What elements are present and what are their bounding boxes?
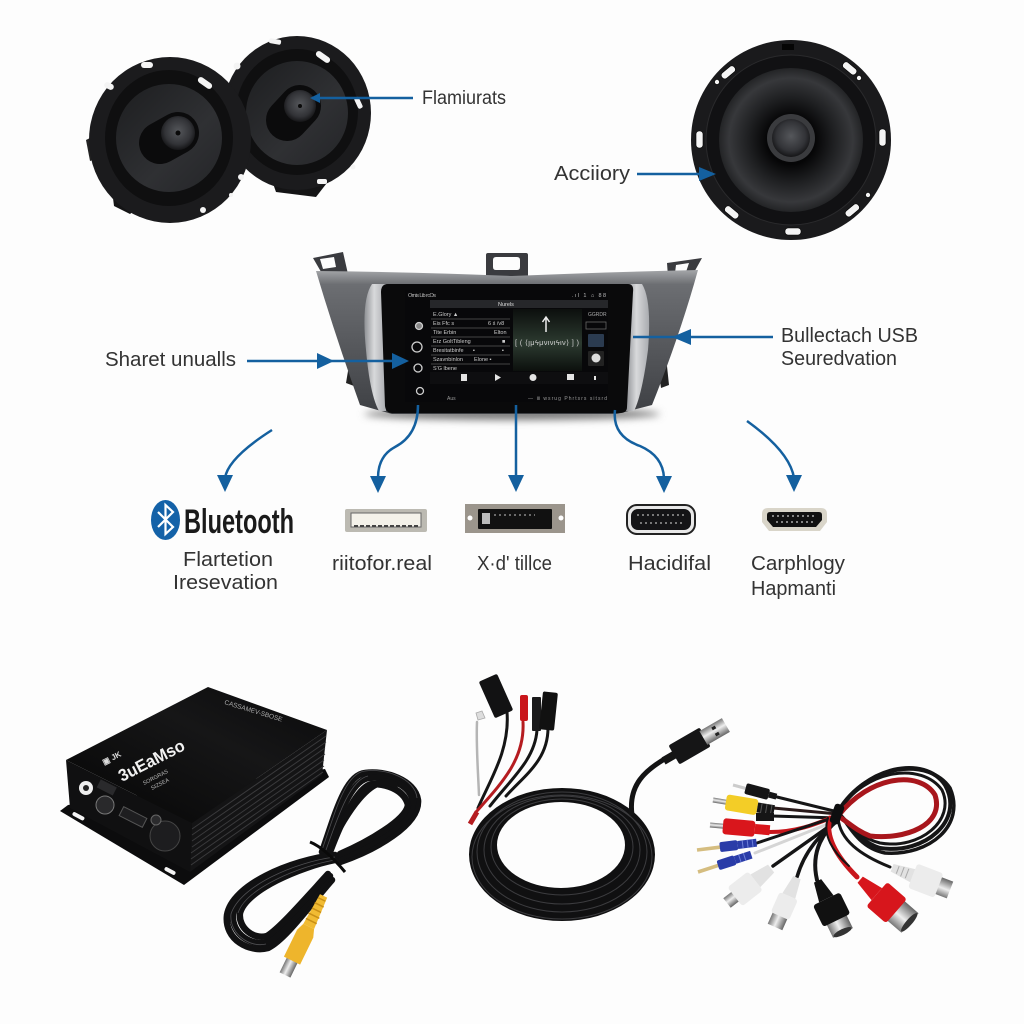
speaker pair, top left <box>86 36 371 223</box>
down arrow 2 <box>370 405 418 493</box>
red sheath accent <box>470 812 477 824</box>
label: Carphlogy Hapmanti: Carphlogy <box>751 553 845 575</box>
label: Flartetion Iresevation <box>173 549 278 594</box>
leads <box>777 797 838 812</box>
black panel <box>381 284 633 413</box>
amp printing: CASSAMEV-SBOSE <box>223 699 284 724</box>
plug: yellow <box>712 792 775 818</box>
front speaker <box>86 57 251 223</box>
cable tie <box>310 842 345 872</box>
top face <box>66 687 327 823</box>
label: Carphlogy Hapmanti: Hapmanti <box>751 578 836 600</box>
callout: Bullectach USB: Seuredvation <box>781 348 897 370</box>
screen: .ıl 1 ⌂ 88 <box>572 293 606 299</box>
USB lead <box>631 757 668 815</box>
down arrow 4 <box>615 410 672 493</box>
down arrow 1 <box>217 430 272 492</box>
side controls <box>588 334 604 347</box>
socket: white middle <box>766 874 806 931</box>
upper loop <box>322 772 418 862</box>
knot <box>829 803 845 825</box>
coil band <box>469 788 655 921</box>
track list: Elton <box>494 330 507 336</box>
track list: ■ <box>502 339 505 345</box>
screen: Nurels <box>498 302 514 308</box>
socket: black <box>804 874 857 941</box>
label: X·d' tillce: X·d' tillce <box>477 553 552 575</box>
RCA breakout harness <box>696 768 955 941</box>
screen: GGRDR <box>588 312 607 318</box>
oval port icon <box>627 505 695 534</box>
status row: Aus <box>447 396 456 402</box>
label: Flartetion Iresevation: Iresevation <box>173 572 278 594</box>
mounting tabs <box>313 252 348 277</box>
screen <box>405 290 608 402</box>
Bluetooth logo <box>151 500 294 541</box>
callout: Acciiory: Acciiory <box>554 163 630 185</box>
coil strand highlights <box>472 792 652 919</box>
amp printing: ▣ JK <box>101 750 123 767</box>
Bluetooth logo: Bluetooth <box>184 503 294 541</box>
down arrow 3 <box>508 405 524 492</box>
speaker, top right <box>691 40 891 240</box>
socket: white left <box>720 859 779 912</box>
flange <box>60 769 329 885</box>
track list: Bresitatbinfe <box>433 348 464 354</box>
map panel <box>513 309 582 371</box>
connector: red <box>520 695 528 721</box>
connector: black pair <box>532 691 558 731</box>
screen: Ornis Lib rcOs <box>408 293 436 299</box>
connector: phone jack <box>476 711 485 720</box>
plug: blue lower <box>696 850 753 877</box>
track list: Tite Erbin <box>433 330 456 336</box>
track list: Szavnbinlon <box>433 357 463 363</box>
head unit <box>313 252 702 420</box>
label: Hacidifal: Hacidifal <box>628 553 711 575</box>
HDMI port icon <box>762 508 827 531</box>
silver strips <box>364 284 386 411</box>
plug: red <box>709 817 770 838</box>
track list: Erz GoltTibleng <box>433 339 471 345</box>
track list: ▪ <box>473 348 475 354</box>
DVI port icon <box>465 504 565 533</box>
down arrow 5 <box>747 421 802 492</box>
callout: Flamiurats <box>310 88 506 109</box>
mounting slots <box>696 61 886 235</box>
figure-eight wires <box>755 768 954 880</box>
fan-out leads <box>476 712 548 812</box>
callout: Bullectach USB <box>633 325 918 370</box>
label: Carphlogy Hapmanti <box>751 553 845 600</box>
coiled video cable with yellow plug <box>227 770 418 979</box>
track list <box>431 312 510 372</box>
front panel <box>66 760 192 872</box>
lower loop <box>227 855 335 949</box>
USB port icon <box>345 509 427 532</box>
callout: Acciiory <box>554 163 716 185</box>
track list: ▪ <box>502 348 504 354</box>
callout: Sharet unualls <box>105 349 409 371</box>
callout: Flamiurats: Flamiurats <box>422 88 506 109</box>
amp printing: 3uEaMso <box>115 736 188 786</box>
screen: [ ( ⟨ȷμϟμνινιϟιν⟩ ] ) <box>515 338 580 347</box>
yellow RCA plug <box>277 892 332 979</box>
track list: Elone ▪ <box>474 357 492 363</box>
USB plug <box>658 715 731 771</box>
track list: Eis Ffc s <box>433 321 454 327</box>
screen: — Ⅲ wsrug Phrtsrs sitsrd <box>528 396 607 402</box>
rear speaker <box>223 36 371 197</box>
callout: Bullectach USB: Bullectach USB <box>781 325 918 347</box>
amp printing: SIZSEA <box>150 777 171 792</box>
left menu icons <box>412 322 424 394</box>
plug: black <box>732 780 778 802</box>
amp printing: SORGRAS <box>142 769 170 787</box>
track list: E.Glory ▲ <box>433 312 458 318</box>
bezel <box>316 270 698 414</box>
track list: S'G lbene <box>433 366 457 372</box>
track list: 6 ś /v8 <box>488 321 504 327</box>
socket: red <box>850 868 922 936</box>
amp printing <box>101 699 284 792</box>
callout: Sharet unualls: Sharet unualls <box>105 349 236 371</box>
label: Flartetion Iresevation: Flartetion <box>183 549 273 571</box>
USB harness cable <box>469 674 731 921</box>
side finned face <box>190 730 327 872</box>
plug: blue upper <box>696 838 757 855</box>
transport bar <box>430 372 608 384</box>
amplifier box <box>60 687 329 885</box>
connector: large black <box>479 674 513 718</box>
small black ribbing <box>756 813 774 821</box>
socket: white right <box>887 856 955 902</box>
label: riitofor.real: riitofor.real <box>332 553 432 575</box>
